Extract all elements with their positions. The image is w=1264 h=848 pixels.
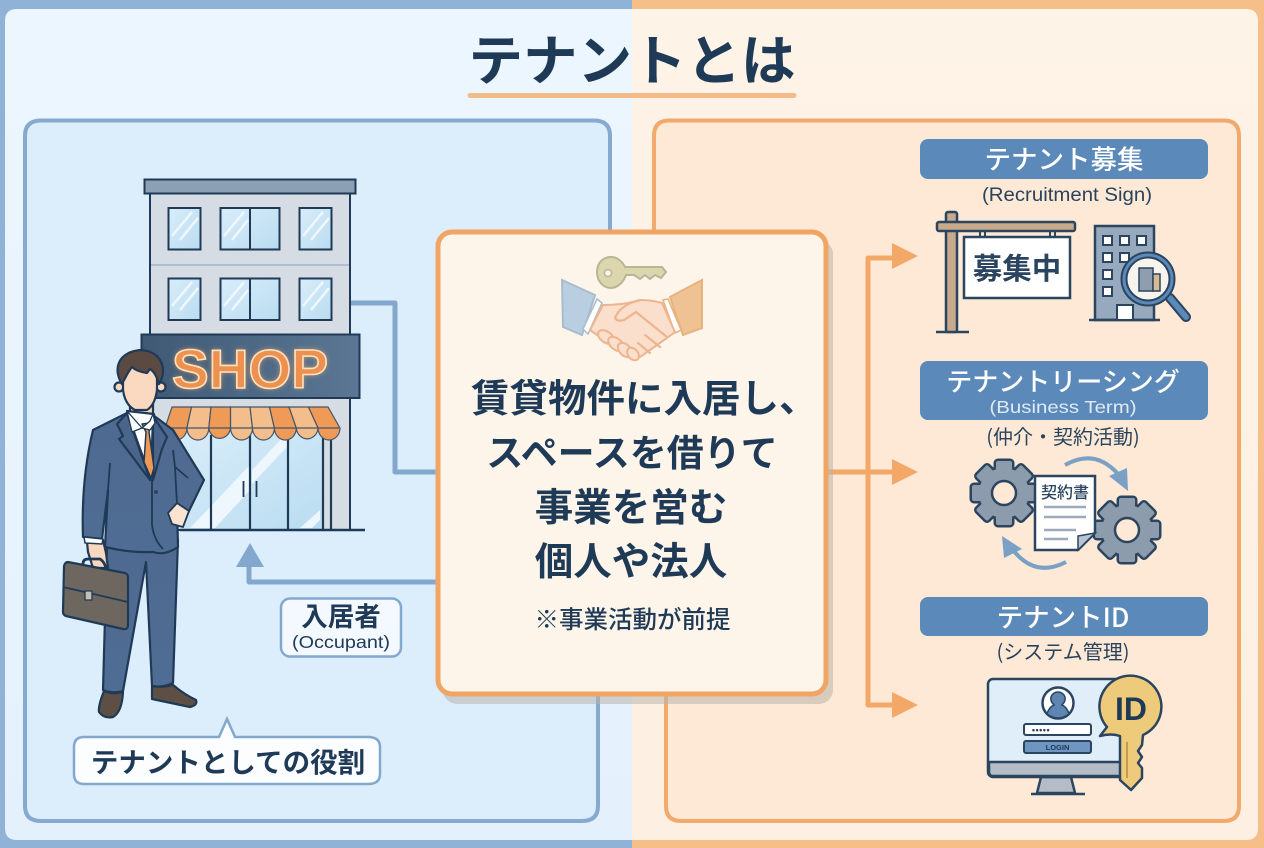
center definition text: 事業を営む [535,477,727,533]
section: tenant ID: (システム管理) [997,636,1129,665]
neon SHOP sign: SHOP [172,338,328,400]
arrows: usage branches [828,243,918,718]
key [597,257,666,288]
icon: gears and contract [972,458,1159,568]
icon: handshake with key [562,257,702,363]
panel: occupant side [25,120,610,821]
heading pill [920,139,1208,179]
center definition text: 賃貸物件に入居し、 [471,368,818,424]
contract document [1035,476,1095,550]
tie [142,423,154,478]
icon: recruitment signboard [936,212,1075,332]
heading pill [920,361,1208,420]
section: tenant leasing: (Business Term) [990,397,1136,417]
collar [127,411,155,432]
neon SHOP sign: SHOP [172,338,328,400]
hand holding case [87,540,108,568]
fingers [595,327,641,363]
title: テナントとは [468,17,796,96]
icon: ID key [1099,676,1161,790]
callout: tenant role [74,719,380,784]
section: tenant leasing [920,361,1208,450]
icon: businessman with briefcase [83,350,204,717]
section: tenant recruitment: (Recruitment Sign) [982,185,1152,206]
center note: ※事業活動が前提 [534,601,730,636]
icon: gears and contract: 契約書 [1041,479,1089,503]
jacket details [108,450,188,549]
heading pill [920,597,1208,636]
shoes [99,691,123,717]
cycle arrows [1065,458,1118,474]
hands [590,300,675,358]
callout: tenant role: テナントとしての役割 [91,740,365,780]
arrow: building connector [350,303,440,472]
cuff [84,537,103,544]
label: occupant [281,595,401,656]
sleeves [562,280,595,335]
lapels [117,413,167,480]
awning [165,407,340,440]
gap behind right arm [175,467,188,505]
center definition text [471,368,818,587]
section: tenant ID [920,596,1208,665]
label: occupant: (Occupant) [292,632,390,652]
arrow: occupant connector [236,543,440,582]
hand on hip [168,503,189,527]
icon: ID key: ID [1115,691,1147,727]
jacket [83,413,204,553]
windows [168,208,332,320]
icon: briefcase [63,559,128,629]
icon: shop building [142,180,365,530]
sign board [142,334,360,398]
icon: login monitor [988,679,1133,794]
section: tenant ID: テナントID [997,596,1129,635]
section: tenant recruitment [920,138,1208,206]
neck and face [130,398,153,419]
title underline [470,93,794,98]
icon: building with magnifier [1089,226,1186,320]
section: tenant leasing: テナントリーシング [946,362,1180,399]
label: occupant: 入居者 [301,595,381,634]
hair [118,350,163,384]
section: tenant recruitment: テナント募集 [984,138,1144,177]
icon: login monitor: LOGIN [1046,743,1069,752]
icon: login monitor: ••••• [1032,725,1050,735]
legs [103,540,178,692]
icon: recruitment signboard: 募集中 [973,246,1061,288]
shop front glass [180,430,323,529]
shirt [127,411,155,480]
center panel shadow and box [438,232,833,704]
center definition text: スペースを借りて [486,423,778,477]
panel: usage side [654,120,1239,821]
section: tenant leasing: (仲介・契約活動) [986,421,1140,450]
center definition text: 個人や法人 [535,531,727,587]
